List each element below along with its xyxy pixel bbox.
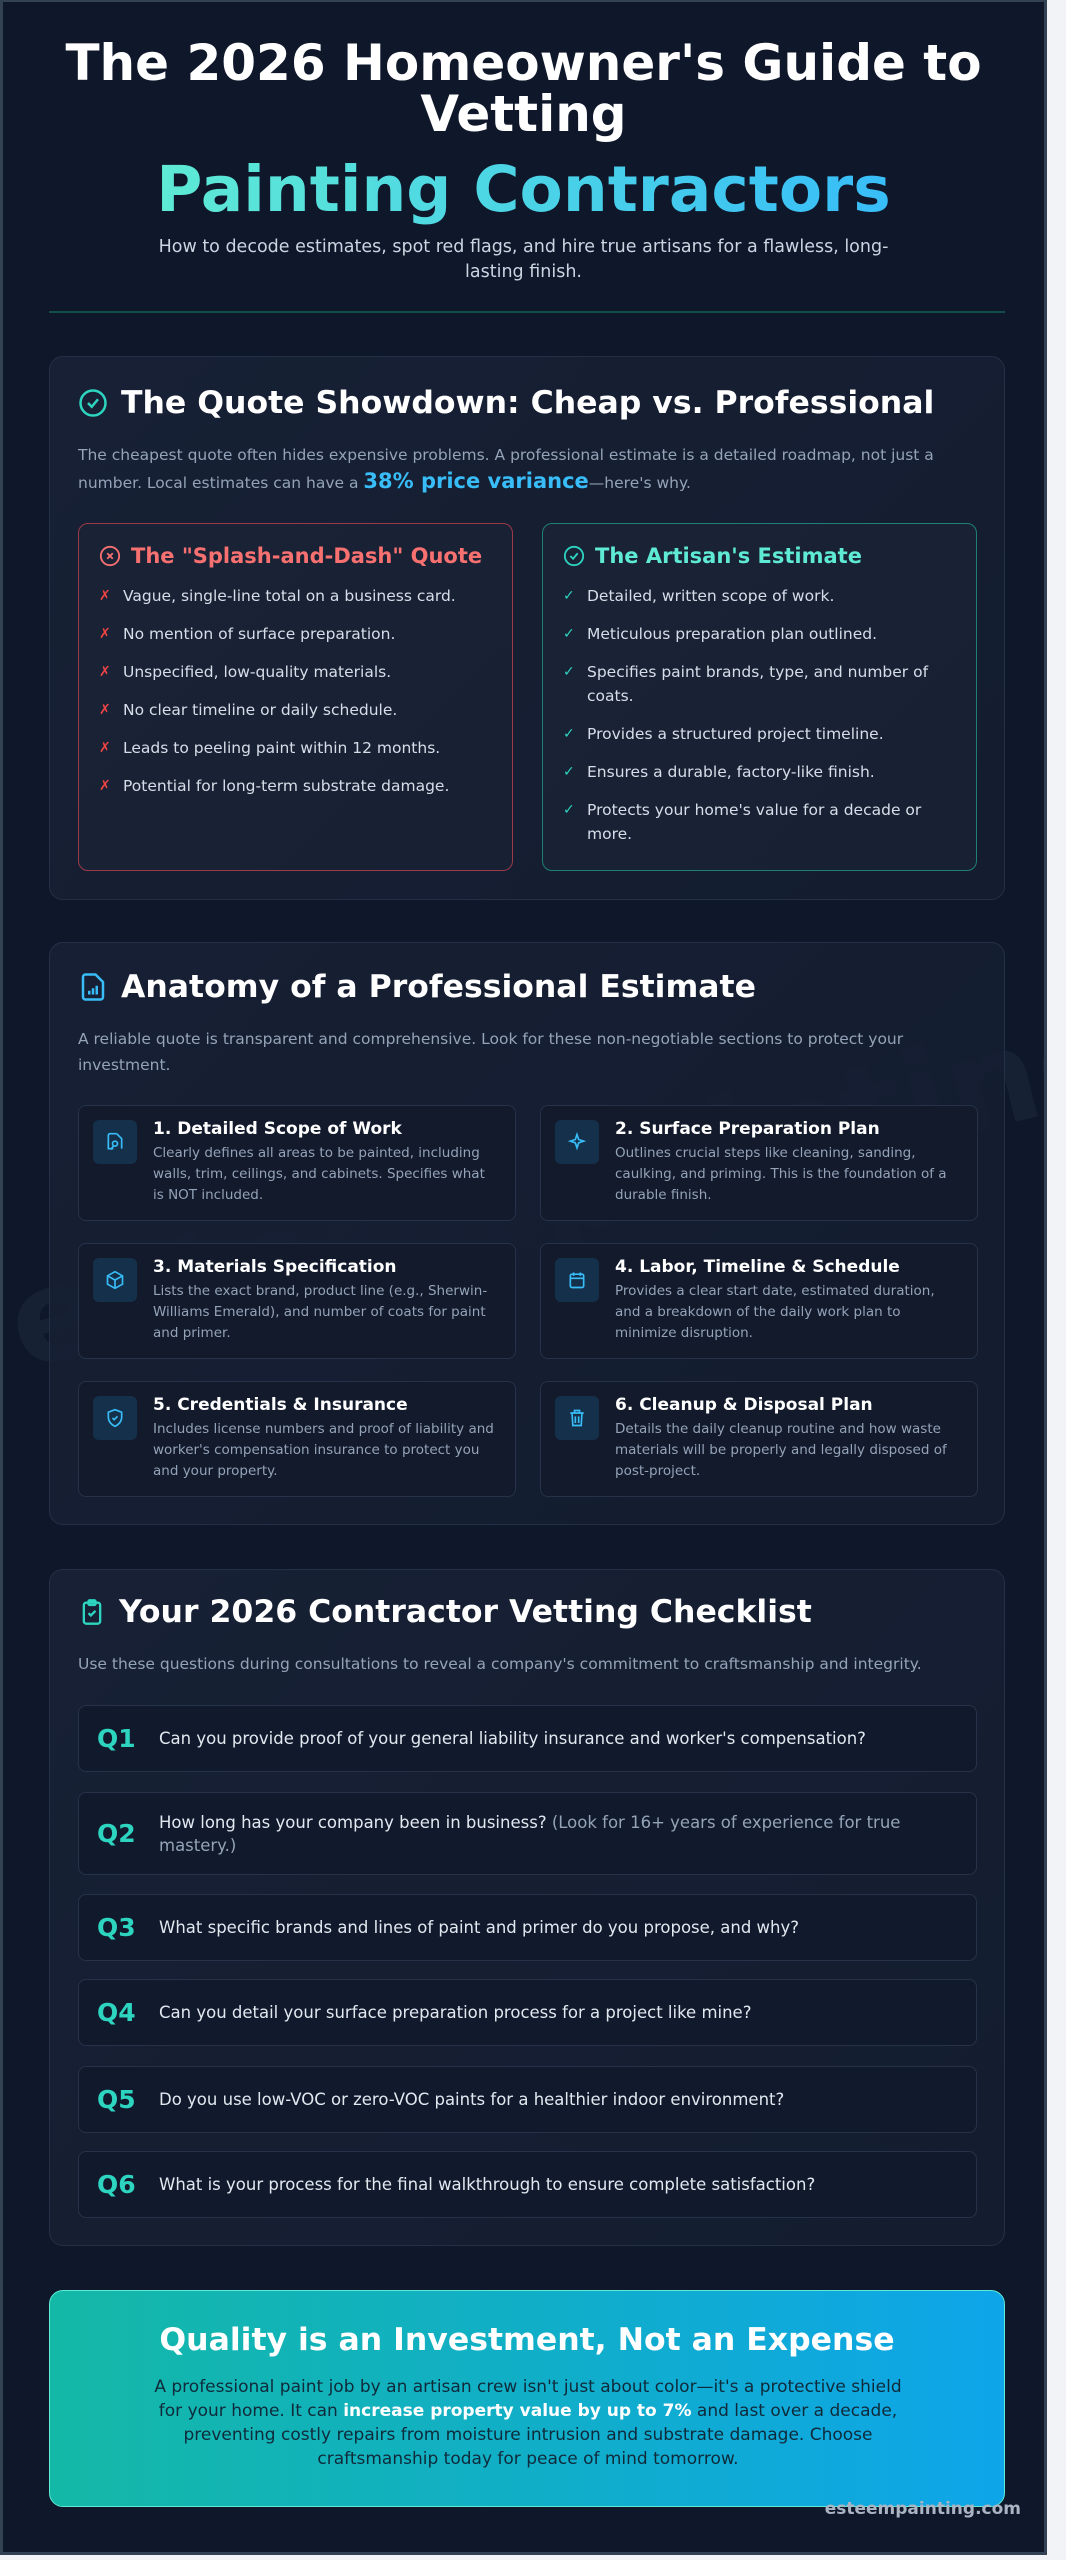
card: splash and dash: Potential for long-term substrate damage. (123, 777, 449, 795)
card: splash and dash: The "Splash-and-Dash" Quote (131, 544, 482, 568)
title: The 2026 Homeowner's Guide to (65, 34, 982, 92)
card: artisan estimate: Detailed, written scope of work. (587, 587, 834, 605)
Q1: Can you provide proof of your general liability insurance and worker's compensation? (159, 1729, 866, 1748)
card 2 (540, 1105, 978, 1221)
card 3: 3. Materials Specification (153, 1257, 397, 1277)
Q6: What is your process for the final walkthrough to ensure complete satisfaction? (159, 2175, 815, 2194)
card: artisan estimate: Meticulous preparation plan outlined. (587, 625, 877, 643)
card 2: Outlines crucial steps like cleaning, sanding, caulking, and priming. This is the foundation of a durable finish. (615, 1145, 947, 1203)
Q1: Q1 (97, 1724, 136, 1753)
card 3: Lists the exact brand, product line (e.g., Sherwin-Williams Emerald), and number of coats for paint and primer. (153, 1283, 487, 1341)
brand watermark: esteempainting.com (825, 2499, 1021, 2519)
card 5 (78, 1381, 516, 1497)
Q2: Q2 (97, 1819, 136, 1848)
Q4: Q4 (97, 1998, 136, 2027)
callout body: A professional paint job by an artisan crew isn't just about color—it's a protective shield for your home. It can increase property value by up to 7% and last over a decade, preventing costly repairs from moisture intrusion and substrate damage. Choose craftsmanship today for peace of mind tomorrow. (154, 2377, 902, 2469)
card: splash and dash: ✗ (99, 702, 111, 718)
intro text: The cheapest quote often hides expensive problems. A professional estimate is a detailed roadmap, not just a number. Local estimates can have a 38% price variance—here's why. (78, 446, 934, 493)
card: splash and dash: No clear timeline or daily schedule. (123, 701, 397, 719)
card: splash and dash: Unspecified, low-quality materials. (123, 663, 391, 681)
callout heading: Quality is an Investment, Not an Expense (159, 2322, 895, 2358)
card 1: Clearly defines all areas to be painted, including walls, trim, ceilings, and cabinets. Specifies what is NOT included. (153, 1145, 485, 1203)
card 1: 1. Detailed Scope of Work (153, 1119, 402, 1139)
card 2: 2. Surface Preparation Plan (615, 1119, 880, 1139)
subtitle: How to decode estimates, spot red flags, and hire true artisans for a flawless, long-lasting finish. (159, 237, 888, 282)
card: artisan estimate: ✓ (563, 626, 575, 642)
card: artisan estimate: The Artisan's Estimate (595, 544, 862, 568)
card 5: 5. Credentials & Insurance (153, 1395, 408, 1415)
Q3 (78, 1894, 977, 1961)
card 6: Details the daily cleanup routine and how waste materials will be properly and legally disposed of post-project. (615, 1421, 947, 1479)
card: artisan estimate: ✓ (563, 664, 575, 680)
card: splash and dash: Vague, single-line total on a business card. (123, 587, 456, 605)
card: splash and dash: ✗ (99, 664, 111, 680)
card: artisan estimate: Ensures a durable, factory-like finish. (587, 763, 875, 781)
panel: vetting checklist (49, 1569, 1005, 2246)
card: splash and dash (78, 523, 513, 871)
card: artisan estimate (542, 523, 977, 871)
intro text: Use these questions during consultations to reveal a company's commitment to craftsmanship and integrity. (78, 1655, 922, 1673)
card 6 (540, 1381, 978, 1497)
card: artisan estimate: Protects your home's value for a decade or more. (587, 801, 921, 843)
heading: Your 2026 Contractor Vetting Checklist (119, 1594, 812, 1630)
card: splash and dash: Leads to peeling paint within 12 months. (123, 739, 440, 757)
card 4: 4. Labor, Timeline & Schedule (615, 1257, 900, 1277)
panel: quote showdown (49, 356, 1005, 900)
callout: quality investment (49, 2290, 1005, 2507)
card: splash and dash: ✗ (99, 626, 111, 642)
Q6 (78, 2151, 977, 2218)
card: splash and dash: ✗ (99, 778, 111, 794)
Q5: Q5 (97, 2085, 136, 2114)
Q2: How long has your company been in business? (Look for 16+ years of experience for true mastery.) (159, 1812, 900, 1854)
title: Vetting (420, 85, 627, 143)
card 1 (78, 1105, 516, 1221)
Q4 (78, 1979, 977, 2046)
card: artisan estimate: ✓ (563, 802, 575, 818)
heading: Anatomy of a Professional Estimate (121, 969, 756, 1005)
Q1 (78, 1705, 977, 1772)
Q6: Q6 (97, 2170, 136, 2199)
card 4: Provides a clear start date, estimated duration, and a breakdown of the daily work plan to minimize disruption. (615, 1283, 935, 1341)
card: splash and dash: No mention of surface preparation. (123, 625, 395, 643)
intro text: A reliable quote is transparent and comprehensive. Look for these non-negotiable sections to protect your investment. (78, 1030, 903, 1074)
Q5: Do you use low-VOC or zero-VOC paints for a healthier indoor environment? (159, 2090, 784, 2109)
card: artisan estimate: ✓ (563, 726, 575, 742)
card: artisan estimate: Provides a structured project timeline. (587, 725, 884, 743)
card: artisan estimate: Specifies paint brands, type, and number of coats. (587, 663, 928, 705)
card: artisan estimate: ✓ (563, 764, 575, 780)
card: artisan estimate: ✓ (563, 588, 575, 604)
card: splash and dash: ✗ (99, 588, 111, 604)
Q3: Q3 (97, 1913, 136, 1942)
Q2 (78, 1792, 977, 1875)
card 4 (540, 1243, 978, 1359)
Q5 (78, 2066, 977, 2133)
panel: anatomy of estimate (49, 942, 1005, 1525)
card 3 (78, 1243, 516, 1359)
card 6: 6. Cleanup & Disposal Plan (615, 1395, 873, 1415)
Q4: Can you detail your surface preparation process for a project like mine? (159, 2003, 751, 2022)
card 5: Includes license numbers and proof of liability and worker's compensation insurance to protect you and your property. (153, 1421, 494, 1479)
title highlight: Painting Contractors (156, 153, 891, 226)
Q3: What specific brands and lines of paint and primer do you propose, and why? (159, 1918, 799, 1937)
card: splash and dash: ✗ (99, 740, 111, 756)
title (65, 34, 982, 143)
heading: The Quote Showdown: Cheap vs. Professional (121, 385, 934, 421)
